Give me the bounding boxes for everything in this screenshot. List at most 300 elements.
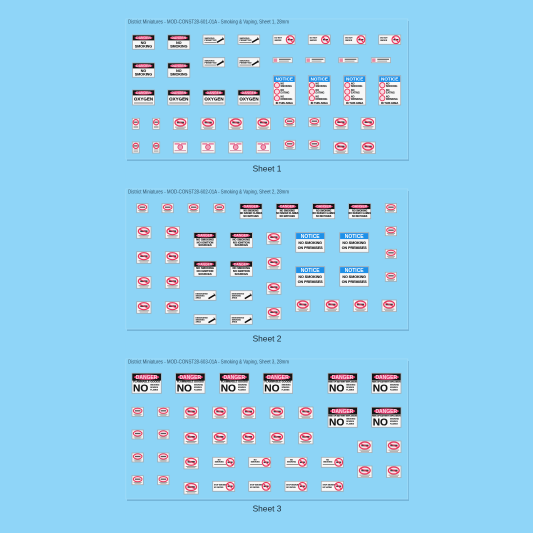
sign: danger flammable goods: SMOKING (238, 385, 248, 387)
sign: notice tall: IN THIS AREA (381, 101, 398, 105)
small sign (153, 142, 160, 153)
sign: danger flammable goods: FLAMMABLE GOODS (133, 380, 160, 384)
small sign (132, 430, 143, 439)
sign: designated smoking area (230, 315, 252, 324)
sign: danger three lines: NO MATCHES (243, 215, 259, 218)
sign: notice tall (379, 76, 401, 105)
sign: danger no smoking (168, 63, 190, 77)
sign: danger three lines: NO MATCHES (280, 215, 295, 218)
sign: notice tall: NOTICE (276, 77, 293, 82)
sign: designated smoking area: SMOKING (232, 295, 241, 297)
sign: notice tall: EATING (351, 92, 360, 95)
small sign (385, 204, 397, 213)
small sign (184, 457, 198, 469)
sign: danger no smoking: DANGER (136, 64, 151, 68)
small sign (270, 407, 284, 419)
sign: stop smoking with ring: STOP SMOKING (286, 484, 300, 486)
small sign (267, 283, 281, 294)
sign: danger battery explosion: FLAMES (390, 388, 399, 391)
small sign (158, 430, 169, 439)
sign: notice tall: SMOKING (386, 85, 397, 88)
small sign (256, 118, 271, 130)
sign: no smoking with ring: SMOKING (323, 462, 333, 464)
sign: notice tall: NO (351, 83, 355, 86)
sign: danger three lines: NO MATCHES (316, 215, 332, 218)
sign: smoking permitted: SMOKING (240, 61, 250, 63)
sign: danger no ignition sources: SOURCES (235, 272, 248, 276)
sign: notice no smoking on premises: ON PREMISES (298, 280, 323, 284)
sign: notice no smoking on premises (340, 267, 369, 286)
sign: no smoking with ring: SMOKE (345, 40, 353, 42)
sign: smoking permitted (203, 35, 225, 44)
sign: notice no smoking on premises: NO SMOKING (342, 241, 366, 245)
sign: danger battery explosion: RISK OF BATTERY EXPLOSION (328, 415, 357, 418)
sign: danger three lines: NO NAKED FLAMES (276, 212, 299, 215)
sign: danger flammable goods: NO (221, 384, 236, 395)
sign: danger no smoking: NO (176, 69, 182, 73)
sign: smoking permitted: PERMITTED (240, 63, 252, 65)
sign: no smoking with ring: NO (290, 459, 293, 461)
sign: danger no ignition sources: NO IGNITION (233, 269, 250, 273)
sign: notice no smoking on premises: NOTICE (301, 234, 320, 240)
sign: danger three lines: NO SMOKING (280, 210, 295, 212)
sign: no smoking with ring (344, 35, 366, 44)
sign: danger battery explosion (328, 373, 357, 395)
sign: notice tall: NO (386, 96, 390, 99)
small sign (165, 302, 180, 313)
sign: danger battery explosion: SPARKS (390, 386, 398, 389)
sign: notice tall: NO (280, 89, 284, 92)
small sign (184, 407, 198, 419)
sign: danger flammable goods: FLAMES (238, 388, 247, 391)
small sign (284, 140, 295, 149)
sign: danger battery explosion: SMOKING (346, 419, 356, 421)
sign: no smoking with ring (321, 457, 343, 467)
sign: notice tall: NOTICE (346, 77, 363, 82)
sign: danger oxygen: DANGER (171, 91, 187, 95)
sign: danger flammable goods: FLAMMABLE GOODS (221, 380, 248, 384)
sign: danger no smoking: DANGER (136, 36, 151, 40)
sign: danger flammable goods: NO (133, 384, 148, 395)
sign: danger battery explosion: DANGER (332, 375, 354, 381)
sign: danger oxygen (132, 90, 154, 105)
sign: notice no smoking on premises: NO SMOKING (298, 275, 322, 279)
panel: sheet 2 (126, 189, 409, 331)
small sign (325, 300, 339, 312)
small sign (358, 441, 372, 453)
sign: danger flammable goods (132, 373, 161, 395)
sign: stop smoking with ring: STOP SMOKING (214, 484, 228, 486)
sign: notice no smoking on premises: NOTICE (345, 268, 364, 274)
small sign (214, 204, 225, 213)
sign: stop smoking with ring: STOP SMOKING (250, 484, 264, 486)
sign: notice no smoking on premises (340, 233, 369, 252)
sign: danger battery explosion: RISK OF BATTERY EXPLOSION (372, 381, 401, 384)
sign: danger no smoking: DANGER (171, 36, 187, 40)
sign: no smoking with ring: NO (254, 459, 257, 461)
sign: danger three lines (313, 204, 335, 219)
sign: notice tall: NO (315, 96, 319, 99)
small sign (158, 476, 169, 485)
small sign (229, 118, 243, 130)
sign: smoking permitted: PERMITTED (204, 63, 217, 65)
sign: smoking permitted (238, 35, 260, 44)
sheet 2 title: District Miniatures - MOD-CONST28-602-01A - Smoking & Vaping, Sheet 2, 28mm (128, 189, 289, 195)
tiny sign (339, 58, 358, 63)
sign: danger oxygen: DANGER (242, 91, 257, 95)
sign: danger no ignition sources: SOURCES (198, 243, 212, 247)
sheet 1 title: District Miniatures - MOD-CONST28-601-01A - Smoking & Vaping, Sheet 1, 28mm (128, 19, 289, 25)
sign: stop smoking with ring: NO VAPING (286, 486, 296, 489)
sign: danger flammable goods: NO (177, 384, 192, 395)
small sign (165, 277, 180, 288)
sign: notice no smoking on premises: ON PREMISES (298, 246, 323, 250)
sign: danger battery explosion: NO (373, 418, 388, 429)
sign: danger battery explosion (328, 407, 357, 429)
sign: danger no smoking (132, 63, 154, 77)
sign: danger three lines: NO SMOKING (352, 210, 367, 212)
sign: notice tall (308, 76, 330, 105)
sign: stop smoking with ring: NO VAPING (323, 486, 333, 489)
sign: danger three lines: DANGER (352, 205, 368, 209)
small sign (382, 300, 396, 312)
sign: designated smoking area: DESIGNATED (232, 292, 245, 295)
sign: danger oxygen (168, 90, 190, 105)
sign: danger battery explosion (372, 373, 401, 395)
sign: danger no ignition sources: NO SMOKING (232, 266, 250, 270)
sign: notice no smoking on premises: ON PREMISES (342, 246, 367, 250)
sign: no smoking with ring: DO NOT (380, 38, 388, 40)
panel: sheet 1 (126, 19, 409, 161)
sign: no smoking with ring: SMOKING (251, 462, 260, 464)
small sign (361, 118, 375, 129)
sign: notice no smoking on premises (296, 233, 325, 252)
sign: danger oxygen: OXYGEN (134, 97, 153, 102)
small sign (270, 432, 284, 444)
small sign (132, 476, 143, 485)
small sign (385, 272, 397, 281)
sign: danger flammable goods: DANGER (179, 375, 202, 381)
sign: danger battery explosion: FLAMES (346, 388, 355, 391)
caption: sheet 3: Sheet 3 (253, 504, 282, 514)
sign: notice tall: NO (280, 83, 284, 86)
small sign (284, 118, 295, 127)
tiny sign (371, 58, 391, 63)
sign: designated smoking area (194, 291, 216, 300)
small sign (158, 453, 169, 462)
sign: stop smoking with ring (249, 481, 271, 491)
sign: danger battery explosion: DANGER (375, 409, 398, 415)
sign: danger battery explosion: RISK OF BATTERY EXPLOSION (328, 381, 357, 384)
sign: danger no smoking: SMOKING (135, 73, 152, 77)
sign: danger no ignition sources: DANGER (198, 262, 213, 266)
sign: danger battery explosion: SPARKS (346, 420, 355, 423)
sign: no smoking with ring: SMOKE (274, 40, 282, 42)
caption: sheet 1: Sheet 1 (253, 164, 282, 174)
sign: notice tall (344, 76, 366, 105)
sign: no smoking with ring: SMOKE (310, 40, 317, 42)
sign: notice tall: IN THIS AREA (311, 101, 328, 105)
small sign (296, 300, 310, 312)
sign: danger flammable goods: NO (264, 384, 280, 395)
sign: danger flammable goods: FLAMES (194, 388, 203, 391)
sign: no smoking with ring: DO NOT (345, 38, 353, 40)
small sign (358, 466, 372, 478)
sign: no smoking with ring (308, 35, 330, 44)
sign: notice tall: NO (315, 89, 319, 92)
sign: danger flammable goods: DANGER (223, 375, 246, 381)
sign: danger no ignition sources: NO SMOKING (196, 238, 214, 242)
sign: danger no ignition sources: DANGER (234, 262, 249, 266)
sign: danger battery explosion: FLAMES (346, 422, 355, 425)
sign: notice no smoking on premises: NOTICE (301, 268, 320, 274)
sign: danger flammable goods: DANGER (136, 375, 158, 381)
sign: danger oxygen: DANGER (136, 91, 151, 95)
sign: notice tall: IN THIS AREA (346, 101, 363, 105)
small sign (158, 407, 169, 416)
sign: danger three lines (240, 204, 263, 219)
sign: danger oxygen (203, 90, 225, 105)
sign: stop smoking with ring (285, 481, 307, 491)
sign: stop smoking with ring (321, 481, 343, 491)
sheet 3 title: District Miniatures - MOD-CONST28-603-01A - Smoking & Vaping, Sheet 3, 28mm (128, 359, 289, 365)
sign: danger no ignition sources: NO SMOKING (196, 266, 214, 270)
sign: smoking permitted: PERMITTED (240, 40, 252, 42)
sign: danger battery explosion: NO (329, 384, 344, 395)
sign: smoking permitted (203, 58, 225, 67)
sign: danger no ignition sources (194, 261, 216, 276)
sign: danger flammable goods: SPARKS (150, 386, 159, 389)
sign: danger flammable goods (176, 373, 205, 395)
small sign (201, 118, 215, 130)
small sign (173, 118, 188, 130)
sign: danger flammable goods: SPARKS (194, 386, 202, 389)
sign: designated smoking area: DESIGNATED (232, 316, 245, 319)
sign: no smoking with ring: SMOKING (215, 462, 224, 464)
sign: danger flammable goods: SMOKING (194, 385, 204, 387)
sign: danger no ignition sources: NO SMOKING (232, 238, 250, 242)
sign: no smoking with ring (249, 457, 271, 467)
sign: notice no smoking on premises: NO SMOKING (342, 275, 366, 279)
small sign (132, 118, 139, 129)
sign: danger no ignition sources (230, 261, 253, 276)
caption: sheet 2: Sheet 2 (253, 334, 282, 344)
small sign (165, 252, 180, 263)
sign: danger battery explosion: FLAMES (390, 422, 399, 425)
sign: stop smoking with ring (213, 481, 235, 491)
pink sign (173, 142, 187, 153)
sign: notice tall: NO (315, 83, 319, 86)
sign: notice tall: NO (280, 96, 284, 99)
sign: no smoking with ring: SMOKE (380, 40, 388, 42)
sign: designated smoking area (194, 315, 216, 324)
sign: no smoking with ring: DO NOT (310, 38, 318, 40)
sign: danger flammable goods: FLAMES (150, 388, 159, 391)
sign: danger three lines: DANGER (244, 205, 259, 209)
sign: designated smoking area: DESIGNATED (196, 292, 208, 295)
sign: danger flammable goods (220, 373, 249, 395)
small sign (137, 204, 148, 213)
sign: danger no ignition sources: DANGER (234, 234, 249, 238)
sign: notice tall: NOTICE (381, 77, 398, 82)
sign: no smoking with ring: NO (218, 459, 221, 461)
sign: danger battery explosion: SPARKS (390, 420, 398, 423)
small sign (387, 466, 401, 478)
sign: notice tall: NO (351, 89, 355, 92)
sign: danger no ignition sources: SOURCES (198, 272, 212, 276)
tiny sign (273, 58, 292, 63)
sign: danger oxygen: OXYGEN (239, 97, 259, 102)
small sign (213, 432, 227, 444)
small sign (137, 302, 151, 313)
sign: smoking permitted (238, 58, 260, 67)
sign: notice tall: SMOKING (315, 85, 327, 88)
sign: danger flammable goods: SMOKING (150, 385, 160, 387)
small sign (299, 407, 313, 419)
small sign (299, 432, 313, 444)
sign: danger battery explosion: SMOKING (346, 385, 356, 387)
sign: danger three lines: NO SMOKING (316, 210, 331, 212)
sign: danger battery explosion: SPARKS (346, 386, 355, 389)
sign: danger flammable goods: SMOKING (282, 385, 291, 387)
sign: notice tall: EATING (315, 92, 324, 95)
sign: smoking permitted: SMOKING (204, 61, 215, 63)
sign: danger no smoking: SMOKING (170, 45, 188, 49)
tiny sign (306, 58, 325, 63)
sign: stop smoking with ring: STOP SMOKING (323, 484, 336, 486)
sign: designated smoking area: AREA (232, 320, 238, 323)
sign: designated smoking area (230, 291, 252, 300)
sign: danger three lines: NO NAKED FLAMES (313, 212, 335, 215)
sign: danger battery explosion: NO (329, 418, 344, 429)
sign: danger no ignition sources: NO IGNITION (233, 240, 250, 244)
sign: danger flammable goods: DANGER (267, 375, 289, 381)
sign: danger flammable goods: FLAMMABLE GOODS (264, 380, 292, 384)
sign: danger three lines: DANGER (280, 205, 295, 209)
sign: danger no smoking: SMOKING (170, 73, 188, 77)
sign: danger three lines: NO SMOKING (243, 210, 259, 212)
small sign (184, 482, 198, 494)
sign: designated smoking area: SMOKING (196, 319, 205, 321)
small sign (334, 118, 348, 129)
sign: danger no smoking (132, 35, 154, 49)
sign: designated smoking area: DESIGNATED (196, 316, 208, 319)
small sign (137, 277, 151, 288)
pink sign (229, 142, 243, 153)
sign: danger no smoking: DANGER (171, 64, 187, 68)
sign: notice no smoking on premises: ON PREMISES (342, 280, 367, 284)
sign: danger oxygen (238, 90, 260, 105)
sign: danger no ignition sources (230, 233, 253, 248)
sign: notice tall: NO (351, 96, 355, 99)
small sign (309, 118, 320, 127)
sign: notice tall: NO (386, 89, 390, 92)
sign: no smoking with ring (213, 457, 235, 467)
sign: notice tall: EATING (280, 92, 289, 95)
sign: danger flammable goods (263, 373, 293, 395)
small sign (353, 300, 368, 312)
sign: notice tall: DRINKING (280, 98, 292, 101)
pink sign (201, 142, 215, 153)
small sign (162, 204, 173, 213)
sign: notice no smoking on premises: NO SMOKING (298, 241, 322, 245)
sign: notice tall: NO (386, 83, 390, 86)
small sign (385, 227, 397, 236)
sign: danger battery explosion: DANGER (375, 375, 398, 381)
sign: notice tall: IN THIS AREA (276, 101, 293, 105)
sign: danger three lines (276, 204, 299, 219)
sign: danger oxygen: OXYGEN (169, 97, 188, 102)
small sign (267, 258, 281, 269)
small sign (137, 252, 151, 263)
small sign (132, 407, 143, 416)
sign: danger no smoking: NO (141, 41, 146, 45)
sign: danger three lines (349, 204, 371, 219)
small sign (184, 432, 198, 444)
small sign (241, 407, 256, 419)
small sign (387, 441, 401, 453)
small sign (132, 453, 143, 462)
sign: danger battery explosion: SMOKING (390, 419, 400, 421)
sign: danger three lines: NO NAKED FLAMES (349, 212, 371, 215)
sign: smoking permitted: PERMITTED (204, 40, 217, 42)
sign: smoking permitted: SMOKING (204, 38, 215, 40)
sign: notice tall: SMOKING (351, 85, 362, 88)
small sign (153, 118, 160, 129)
sign: designated smoking area: SMOKING (196, 295, 205, 297)
small sign (267, 308, 281, 319)
sign: danger no smoking (168, 35, 190, 49)
sign: danger flammable goods: SPARKS (238, 386, 246, 389)
sign: notice no smoking on premises (296, 267, 325, 286)
panel: sheet 3 (126, 359, 409, 501)
sign: designated smoking area: SMOKING (232, 319, 241, 321)
small sign (213, 407, 227, 419)
sign: danger battery explosion: RISK OF BATTERY EXPLOSION (372, 415, 401, 418)
sign: danger no smoking: NO (141, 69, 146, 73)
small sign (267, 233, 281, 244)
sign: danger three lines: DANGER (316, 205, 332, 209)
small sign (241, 432, 256, 444)
sign: no smoking with ring: NO (326, 459, 330, 461)
sign: stop smoking with ring: NO VAPING (214, 486, 224, 489)
sign: danger no smoking: NO (176, 41, 182, 45)
sign: danger flammable goods: FLAMES (282, 388, 290, 391)
small sign (385, 249, 397, 258)
sign: danger battery explosion: DANGER (332, 409, 354, 415)
small sign (188, 204, 199, 213)
sign: danger no ignition sources (194, 233, 216, 248)
sign: notice tall (273, 76, 295, 105)
pink sign (256, 142, 270, 153)
sign: notice tall: EATING (386, 92, 395, 95)
sign: no smoking with ring (285, 457, 307, 467)
sign: danger no ignition sources: SOURCES (235, 243, 248, 247)
sign: no smoking with ring: SMOKING (287, 462, 297, 464)
small sign (361, 142, 375, 154)
small sign (165, 227, 180, 238)
sign: danger oxygen: OXYGEN (204, 97, 224, 102)
small sign (137, 227, 151, 238)
sign: danger no ignition sources: NO IGNITION (197, 240, 213, 244)
sign: notice tall: NOTICE (311, 77, 328, 82)
small sign (334, 142, 348, 154)
sign: danger battery explosion: NO (373, 384, 388, 395)
small sign (309, 140, 320, 149)
sign: designated smoking area: AREA (196, 296, 201, 299)
sign: danger no ignition sources: DANGER (198, 234, 213, 238)
sign: no smoking with ring (379, 35, 401, 44)
